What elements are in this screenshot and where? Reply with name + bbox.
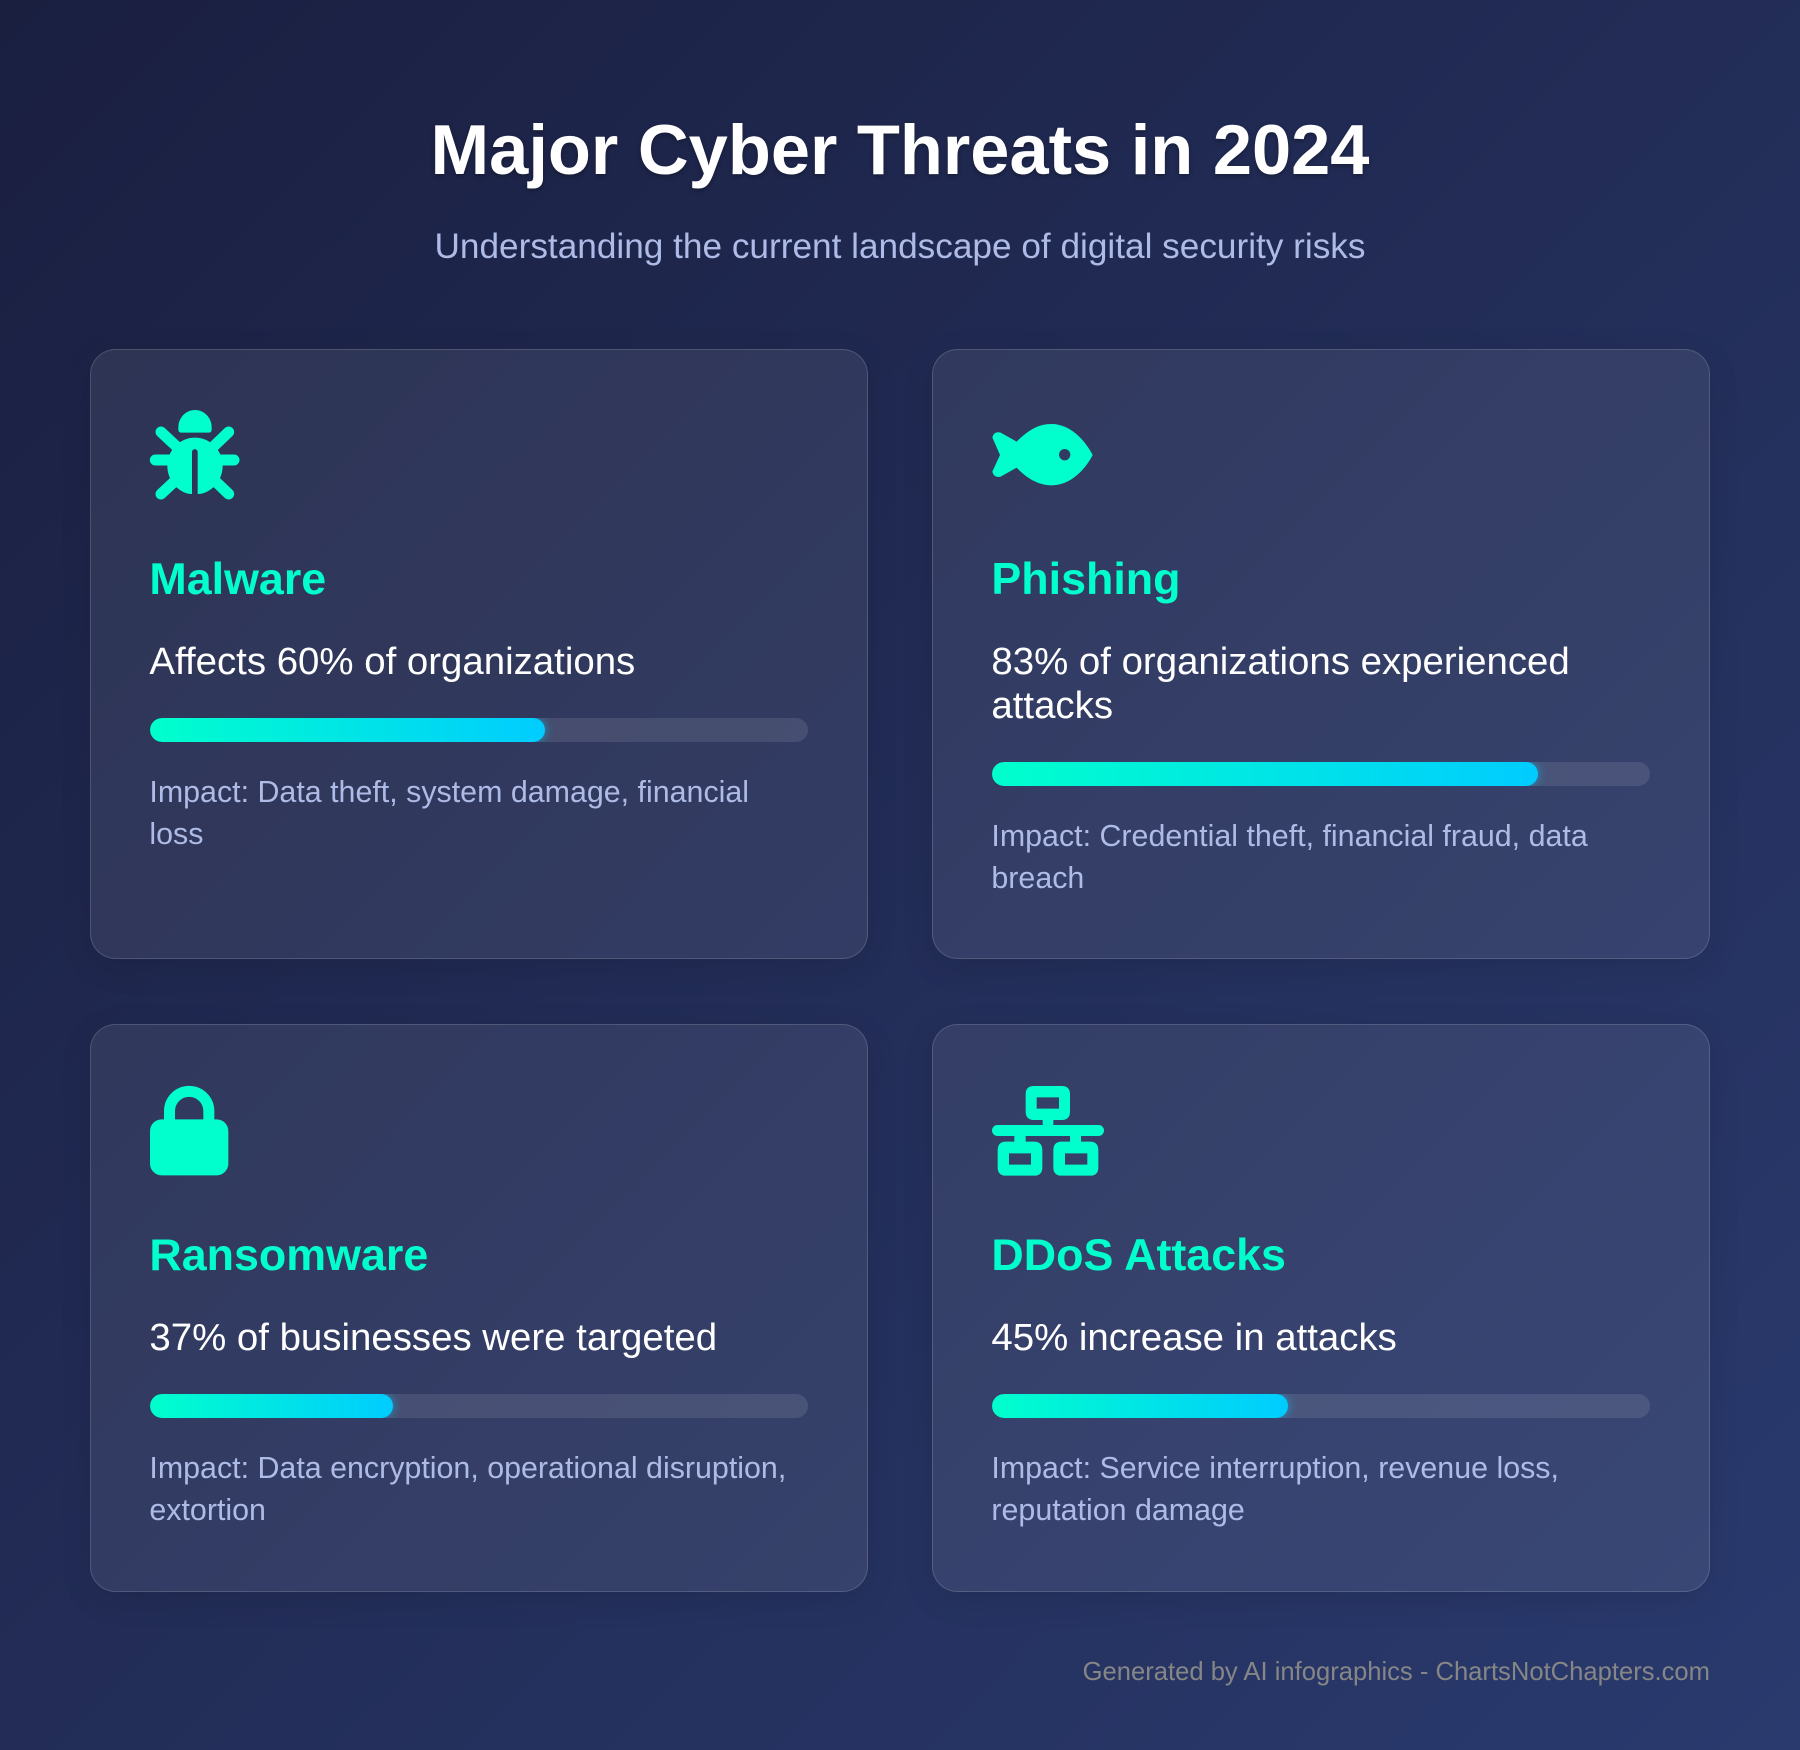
panel: ransomware: [90, 1024, 868, 1592]
statistic: ransomware: 37% of businesses were targeted: [149, 1316, 717, 1358]
impact: phishing: Impact: Credential theft, financial fraud, data breach: [991, 819, 1588, 895]
statistic: phishing: 83% of organizations experienced attacks: [991, 640, 1570, 726]
icon: bug: [150, 410, 240, 500]
panel: malware: [90, 349, 868, 959]
heading: ddos: DDoS Attacks: [991, 1230, 1286, 1280]
impact: malware: Impact: Data theft, system damage, financial loss: [149, 775, 749, 851]
panel: phishing: [932, 349, 1710, 959]
subtitle: Understanding the current landscape of digital security risks: [434, 227, 1366, 266]
impact: ddos: Impact: Service interruption, revenue loss, reputation damage: [991, 1451, 1559, 1527]
footer credit: Generated by AI infographics - ChartsNotChapters.com: [1083, 1658, 1710, 1686]
heading: malware: Malware: [149, 554, 326, 604]
panel: ddos: [932, 1024, 1710, 1592]
icon: fish: [992, 424, 1093, 486]
icon: lock: [150, 1086, 228, 1176]
title: Major Cyber Threats in 2024: [431, 110, 1369, 189]
statistic: malware: Affects 60% of organizations: [149, 640, 635, 682]
impact: ransomware: Impact: Data encryption, operational disruption, extortion: [149, 1451, 786, 1527]
heading: phishing: Phishing: [991, 554, 1181, 604]
progress bar: 37%: [150, 1394, 808, 1418]
icon: network: [992, 1086, 1104, 1176]
progress bar: 83%: [992, 762, 1650, 786]
progress bar: 45%: [992, 1394, 1650, 1418]
heading: ransomware: Ransomware: [149, 1230, 428, 1280]
statistic: ddos: 45% increase in attacks: [991, 1316, 1397, 1358]
progress bar: 60%: [150, 718, 808, 742]
